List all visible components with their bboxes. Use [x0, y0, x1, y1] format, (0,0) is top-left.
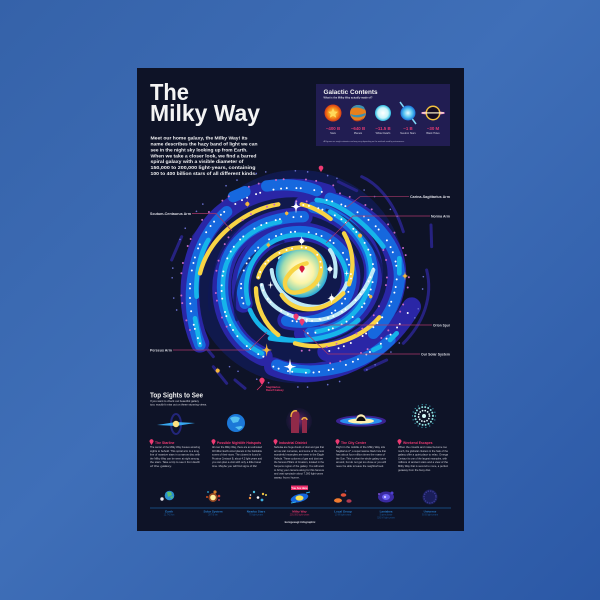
column: weekend escapes: When the crowds and noise become too — [398, 445, 447, 449]
intro text: 100 to 400 billion stars of all different kinds. — [150, 171, 256, 176]
timeline scale line — [150, 507, 451, 509]
timeline sublabels: 12,742 km — [164, 514, 174, 516]
column: industrial district: Nebulae are huge clouds of dust and gas that — [274, 445, 324, 449]
intro text: see in the night sky looking up from Earth. — [150, 148, 248, 152]
orange sparkles — [215, 200, 408, 374]
column: industrial district — [273, 439, 325, 479]
contents labels: Stars — [330, 132, 337, 135]
timeline labels: Laniakea — [380, 510, 393, 514]
column: possible nightlife hotspots: All over the Milky Way, there are an estimated — [212, 445, 262, 449]
arms: indigo layer — [190, 188, 412, 373]
contents labels: Black Holes — [426, 132, 440, 135]
callout lines — [173, 197, 432, 354]
column: industrial district: the famous Pillars of Creation, located in the — [274, 460, 324, 464]
arm labels: Norma Arm — [431, 214, 450, 218]
contents labels: Neutron Stars — [400, 132, 416, 135]
chart: spiral galaxy — [172, 170, 432, 388]
icon: laniakea — [378, 492, 394, 502]
top sights subheading: tour, wouldn't miss out on these stunning views. — [150, 402, 207, 406]
contents labels: Planets — [354, 132, 363, 135]
column: the city center: the Sun. This is what the whole galaxy turns — [336, 456, 386, 460]
column: the city center: Sagittarius A*, a supermassive black hole that — [336, 449, 386, 453]
icon: solar system — [206, 490, 220, 502]
title: Milky Way — [150, 100, 260, 126]
column: industrial district: away from home. — [274, 475, 300, 479]
icon: nebula — [286, 408, 312, 434]
contents values: ~11.5 B — [375, 126, 391, 131]
timeline sublabels: 10 M light-years — [335, 514, 352, 516]
top sights subheading: If you want to check out beautiful galaxy — [150, 399, 200, 403]
timeline sublabels: 287 B km — [208, 514, 218, 516]
intro text — [150, 136, 258, 176]
timeline labels: Milky Way — [292, 510, 307, 514]
timeline sublabels: 70 light-years — [249, 514, 264, 516]
contents heading: Galactic Contents — [324, 90, 378, 96]
column: the starline: line of massive stars in a narrow disc with — [150, 453, 200, 457]
column: weekend escapes: Centauri is one of the largest examples, with — [398, 456, 447, 460]
intro text: name describes the hazy band of light we can — [150, 142, 258, 146]
panel: galactic contents — [316, 84, 450, 146]
column: the city center: around, but do not get too close or you will — [336, 460, 386, 464]
contents values: ~640 B — [351, 126, 365, 131]
arm labels: Orion Spur — [433, 324, 451, 328]
star dots outer — [172, 171, 423, 387]
white sparkles — [267, 200, 349, 375]
faint disk — [192, 170, 405, 383]
arms: dark gaps — [209, 203, 383, 320]
column: industrial district: and vast spectacle about 7,000 light-years — [274, 472, 323, 476]
icon: neutron star — [400, 102, 416, 124]
timeline labels: Local Group — [334, 510, 352, 514]
column: the starline: The center of the Milky Way houses amazing — [150, 445, 200, 449]
timeline labels: Universe — [424, 510, 437, 514]
arms: cyan layer — [195, 200, 399, 371]
top sights subheading — [150, 399, 207, 406]
column: industrial district: Serpens region of the galaxy. You will want — [274, 464, 324, 468]
intro text: Meet our home galaxy, the Milky Way! Its — [150, 136, 248, 140]
contents values: ~30 M — [427, 126, 440, 131]
icon: globular cluster — [412, 404, 436, 428]
intro text: When we take a closer look, we find a barred — [150, 154, 257, 158]
arm labels: Perseus Arm — [150, 348, 172, 352]
contents values — [326, 126, 440, 131]
column: the starline: the stars. Take a trip to see it from Earth — [150, 460, 200, 464]
column: possible nightlife hotspots: you can plan a visit with only a little travel — [212, 460, 261, 464]
column: the city center: has about four million times the mass of — [336, 453, 385, 457]
column: the starline — [150, 439, 200, 468]
icon: planet — [350, 105, 366, 121]
column: weekend escapes: galaxy offer a quiet place to relax. Omega — [398, 453, 448, 457]
outer fragments — [172, 177, 432, 388]
column: the starline: The Starline — [155, 441, 175, 445]
icon: star — [324, 104, 342, 122]
column: weekend escapes: Milky Way that is second to none, a perfect — [398, 464, 448, 468]
title: The — [150, 79, 189, 105]
column: industrial district: Nebula. These columns of gas and dust are — [274, 456, 323, 460]
column: industrial district: act as star nurseries, and some of the most — [274, 449, 324, 453]
timeline labels: Solar System — [203, 510, 223, 514]
map pins — [257, 166, 323, 390]
star dots pink — [181, 179, 409, 363]
star dots white — [190, 188, 412, 373]
column: possible nightlife hotspots: time. Maybe you will find signs of life! — [212, 464, 257, 468]
icon: earth — [160, 491, 174, 501]
column: the city center — [336, 439, 386, 468]
contents subheading: What is the Milky Way actually made of? — [324, 96, 373, 100]
timeline sublabels: Supercluster — [380, 514, 393, 516]
intro text: 150,000 to 200,000 light-years, containing — [150, 165, 256, 170]
timeline labels: Earth — [165, 510, 173, 514]
column: the city center: The City Center — [341, 441, 367, 445]
column: weekend escapes: getaway from the busy disc. — [398, 468, 431, 472]
timeline sublabels: 93 B light-years — [422, 514, 439, 516]
column: the starline: the Milky Way can be seen at night among — [150, 456, 199, 460]
icon: universe — [422, 490, 438, 504]
column: weekend escapes — [398, 439, 448, 472]
column: the starline: sights to behold. This spiral arm is a long — [150, 449, 199, 453]
column: possible nightlife hotspots: zones of their stars. The closest is found in — [212, 453, 261, 457]
timeline sublabels — [164, 514, 439, 520]
poster panel — [137, 68, 464, 531]
icon: starline — [157, 414, 195, 434]
arm labels — [150, 195, 451, 356]
column: the city center: never be able to leave the neighborhood. — [336, 464, 384, 468]
contents values: ~1 B — [403, 126, 413, 131]
arms: pale inner layer — [262, 250, 373, 320]
column: industrial district: to bring your camera along for this famous — [274, 468, 325, 472]
arm labels: Our Solar System — [421, 352, 450, 356]
heading: top sights: Top Sights to See — [150, 392, 203, 400]
column: possible nightlife hotspots — [212, 439, 262, 468]
icon: milky way mini — [290, 492, 310, 504]
contents labels: White Dwarfs — [376, 132, 391, 135]
column: weekend escapes: millions of ancient stars and a view of the — [398, 460, 448, 464]
credit: kurzgesagt infographic — [285, 520, 316, 524]
arms: blue layer — [191, 185, 399, 371]
pin label: Dwarf Galaxy — [266, 388, 284, 392]
arm labels: Carina-Sagittarius Arm — [410, 195, 450, 199]
you are here flag — [291, 486, 308, 490]
column: possible nightlife hotspots: 40 billion Earth-sized planets in the habitable — [212, 449, 262, 453]
column: possible nightlife hotspots: Proxima Centauri B, about 4.2 light-years and — [212, 456, 262, 460]
contents labels — [330, 132, 440, 135]
column: industrial district: Industrial District — [279, 441, 308, 445]
column: weekend escapes: Weekend Escapes — [403, 441, 433, 445]
arms: yellow layer — [200, 204, 379, 346]
column: industrial district: wonderful examples are seen in the Eagle — [274, 453, 324, 457]
column: possible nightlife hotspots: Possible Nightlife Hotspots — [217, 441, 261, 445]
timeline sublabels: 520 M light-years — [377, 516, 396, 520]
column: the starline: of the galaxy. — [150, 464, 172, 468]
icon: local group — [334, 490, 352, 503]
you are here flag: You Are Here — [291, 486, 308, 490]
icon: nearby stars — [249, 491, 267, 501]
contents footnote: All figures are rough estimates and may vary depending on the methods used by astronomers. — [324, 140, 405, 143]
arm labels: Scutum-Centaurus Arm — [150, 212, 191, 216]
timeline labels: Nearby Stars — [247, 510, 266, 514]
column: the city center: Right in the middle of the Milky Way sits — [336, 445, 386, 449]
contents values: ~400 B — [326, 126, 340, 131]
icon: black hole — [421, 106, 445, 120]
icon: white dwarf — [375, 105, 391, 121]
pin label — [266, 385, 284, 392]
central bulge — [276, 246, 328, 298]
icon: blue planet — [227, 414, 245, 432]
title — [150, 79, 260, 126]
icon: black hole center — [336, 414, 386, 426]
intro text: spiral galaxy with a visible diameter of — [150, 159, 244, 164]
sparkles — [215, 200, 408, 375]
timeline labels — [165, 510, 437, 514]
timeline sublabels: 200,000 light-years — [290, 514, 310, 516]
pin label: Sagittarius — [266, 385, 281, 389]
column: weekend escapes: much, the globular clusters in the halo of the — [398, 449, 448, 453]
